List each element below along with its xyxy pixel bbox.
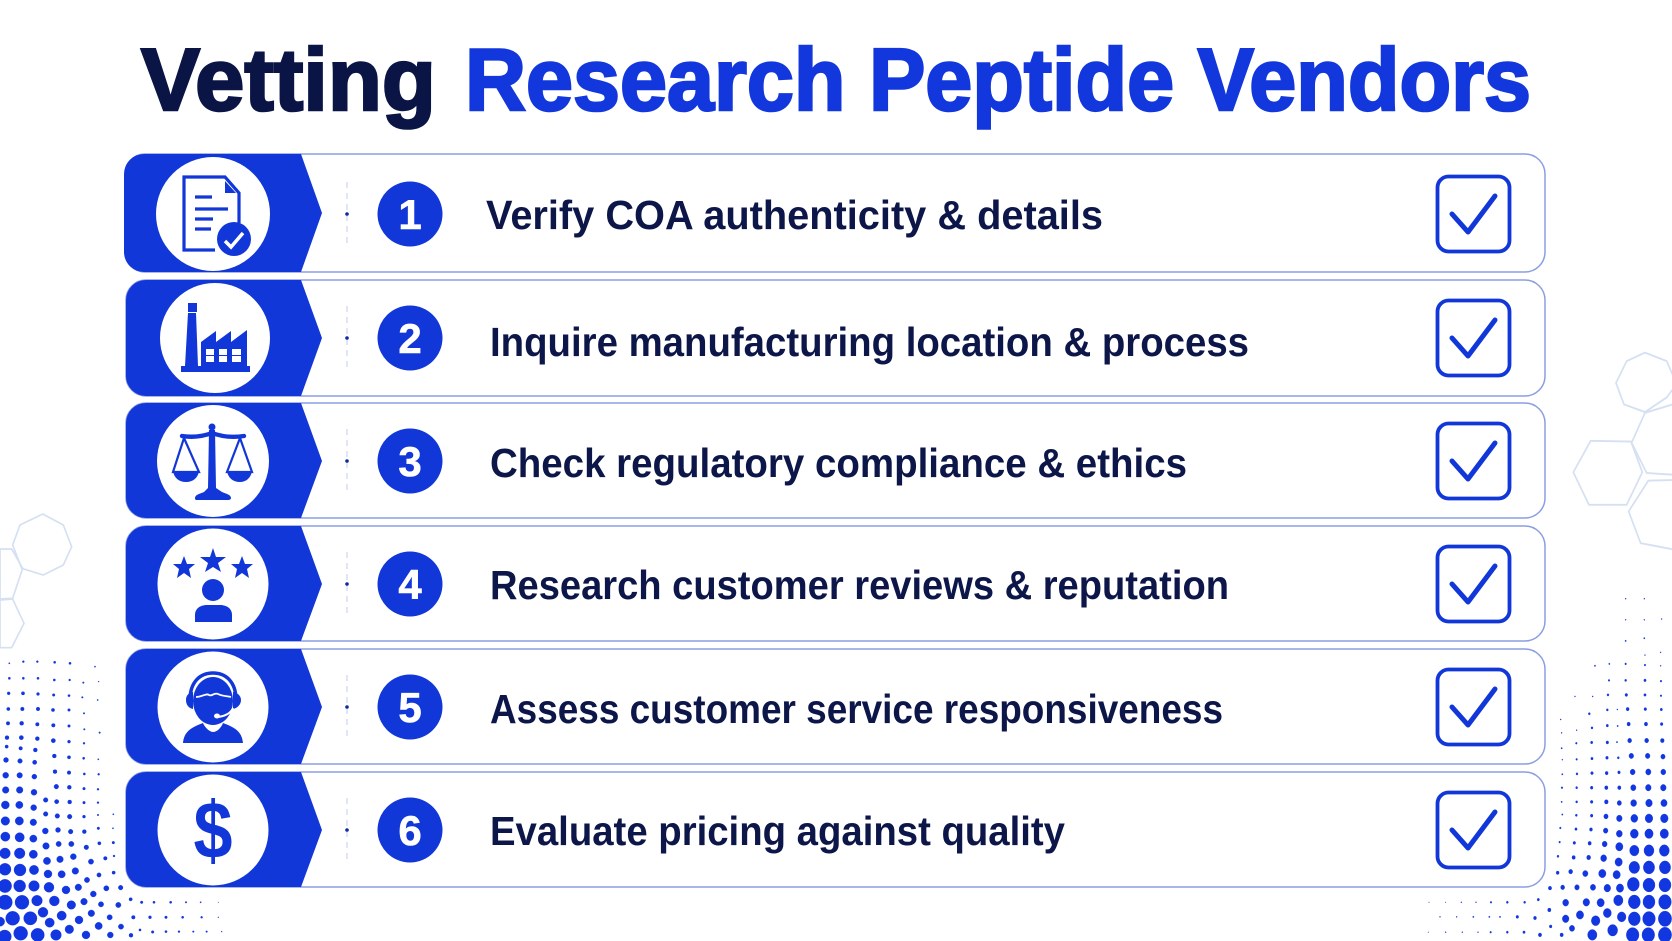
number 4: 4 [398,561,422,608]
number 1: 1 [398,191,422,238]
row 2 text: Inquire manufacturing location & process [490,319,1249,365]
row 5 text: Assess customer service responsiveness [490,686,1223,732]
icon: headset agent [158,652,268,762]
row 4 divider [345,552,349,617]
row 1 checkbox [1438,176,1510,252]
row 2 checkbox [1438,300,1510,376]
background hexagons: right [1573,353,1672,550]
background hexagons: left [0,514,72,648]
title: blue words: Research Peptide Vendors [465,30,1531,129]
row 2 card [126,280,1545,396]
icon: stars and person [158,528,268,640]
row 4 blue tab [126,526,322,641]
number 3 [378,428,442,494]
number 5: 5 [398,684,422,731]
row 4 text: Research customer reviews & reputation [490,562,1229,608]
row 3 divider [345,429,349,494]
row 1 divider [345,182,349,247]
number 6: 6 [398,807,422,854]
row 6: pricing [126,772,1545,887]
row 3 card [126,403,1545,518]
row 1 text: Verify COA authenticity & details [486,192,1103,238]
row 5 divider [345,675,349,740]
number 5 [378,674,442,740]
row 2 blue tab [126,280,322,396]
row 4: reviews [126,526,1545,641]
row 5 blue tab [126,649,322,764]
row 4 checkbox [1438,546,1510,622]
number 2: 2 [398,315,422,362]
row 3 checkbox [1438,424,1510,498]
row 1 card [125,154,1545,272]
number 1 [378,182,442,246]
row 6 divider [345,798,349,863]
number 4 [378,552,442,616]
row 3: regulatory [126,403,1545,518]
number 2 [378,306,442,370]
row 3 blue tab [126,403,322,518]
row 3 text: Check regulatory compliance & ethics [490,440,1187,486]
row 2 divider [345,306,349,371]
halftone dots: bottom right [1428,598,1672,941]
row 6 text: Evaluate pricing against quality [490,808,1065,854]
row 4 card [126,526,1545,641]
number 3: 3 [398,438,422,485]
icon: factory [160,283,270,393]
row 5 checkbox [1438,670,1510,744]
title [141,30,1531,129]
title: dark word: Vetting [141,30,436,129]
icon: dollar sign: $ [194,786,232,876]
icon: scales [157,405,269,517]
row 5: customer service [126,649,1545,764]
row 1: verify COA [124,154,1545,272]
row 6 checkbox [1438,792,1510,868]
halftone dots: bottom left [0,661,222,941]
icon: document with check [156,157,270,271]
row 1 blue tab [124,154,322,272]
row 6 blue tab [126,772,322,887]
row 6 card [126,772,1545,887]
row 5 card [126,649,1545,764]
row 2: manufacturing [126,280,1545,396]
number 6 [378,798,442,862]
icon: dollar sign [158,774,268,886]
